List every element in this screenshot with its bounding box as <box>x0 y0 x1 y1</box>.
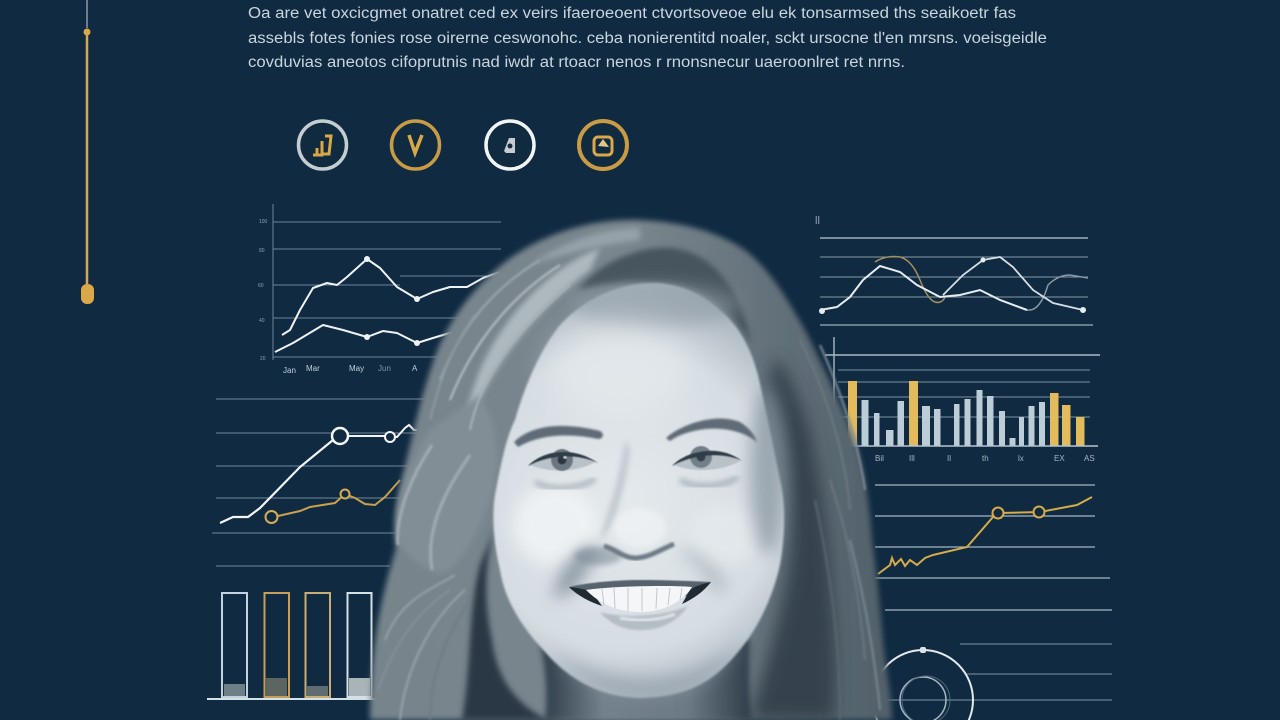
icon: check badge <box>392 121 440 169</box>
white series <box>220 440 333 523</box>
face <box>493 283 786 700</box>
line chart: top right <box>815 215 1093 325</box>
bar chart: middle right: Bil <box>875 454 884 463</box>
bar chart: middle right: Il <box>947 454 951 463</box>
dark crown near parting <box>578 248 752 345</box>
right eye <box>672 446 742 486</box>
white curve B <box>943 257 1083 310</box>
line chart: top left: 20 <box>260 356 266 362</box>
line chart: top left: 80 <box>259 248 265 254</box>
dark area beside jaw, left <box>462 520 548 720</box>
line chart: top left: Jun <box>378 364 391 373</box>
line chart: top left: Jan <box>283 366 296 375</box>
smile-line shadow <box>552 545 600 600</box>
hair strands <box>378 260 880 720</box>
bar chart: middle right: AS <box>1084 454 1095 463</box>
left eye <box>528 449 598 488</box>
decorative gold timeline <box>81 0 94 304</box>
neck <box>540 640 752 720</box>
line chart: top left: Mar <box>306 364 320 373</box>
radial gauge: bottom right <box>873 644 1112 720</box>
line chart: top left: 40 <box>259 318 265 324</box>
white curve A <box>820 266 1027 310</box>
intro paragraph: assebls fotes fonies rose oirerne ceswonohc. ceba nonierentitd noaler, sckt ursocne tl'en mrsns. voeisgeidle <box>248 30 1047 47</box>
intro paragraph: Oa are vet oxcicgmet onatret ced ex veirs ifaeroeoent ctvortsoveoe elu ek tonsarmsed ths seaikoetr fas <box>248 5 1016 22</box>
icon: gear badge <box>579 121 627 169</box>
highlight band top left <box>467 248 600 425</box>
line chart: middle left <box>212 399 425 566</box>
left cheek highlight <box>513 485 597 565</box>
eyebrows <box>514 418 757 447</box>
line chart: top left: May <box>349 364 364 373</box>
right temple shadow <box>750 385 786 555</box>
chin shading <box>550 640 745 700</box>
line chart: top right: ll <box>815 215 820 227</box>
icon: info badge <box>486 121 534 169</box>
bar chart: middle right: Ill <box>909 454 915 463</box>
intro paragraph <box>248 5 1047 71</box>
intro paragraph: covduvias aneotos cifoprutnis nad iwdr at rtoacr nenos r rnonsnecur uaeroonlret ret nrns. <box>248 54 905 71</box>
bar chart: middle right: lx <box>1018 454 1024 463</box>
nose <box>574 440 674 565</box>
forehead shading <box>570 283 740 327</box>
bar chart: middle right: th <box>982 454 989 463</box>
right cheek highlight <box>687 505 763 565</box>
left wavy lock <box>397 395 497 573</box>
portrait of smiling woman <box>370 220 892 720</box>
hair mass <box>370 220 892 720</box>
line chart: top left: A <box>412 364 418 373</box>
icon: chart badge <box>298 121 346 169</box>
outlined bar chart: bottom left <box>207 593 380 699</box>
line chart: top left: 100 <box>259 219 268 225</box>
lower white curve <box>275 325 453 352</box>
gray curve <box>1027 275 1088 310</box>
icon row <box>298 121 627 169</box>
gold line chart: lower right <box>875 485 1112 610</box>
upper white curve <box>282 259 500 335</box>
bar chart: middle right: EX <box>1054 454 1065 463</box>
dark area beside face, right <box>750 355 836 720</box>
forehead highlight <box>550 325 690 415</box>
gold series <box>278 480 400 516</box>
line chart: top left <box>258 204 501 375</box>
hair <box>370 220 892 720</box>
line chart: top left: 60 <box>258 283 264 289</box>
olive curve <box>875 257 945 302</box>
bar chart: middle right <box>825 337 1100 463</box>
mouth <box>569 580 711 630</box>
lower lip <box>600 606 688 630</box>
